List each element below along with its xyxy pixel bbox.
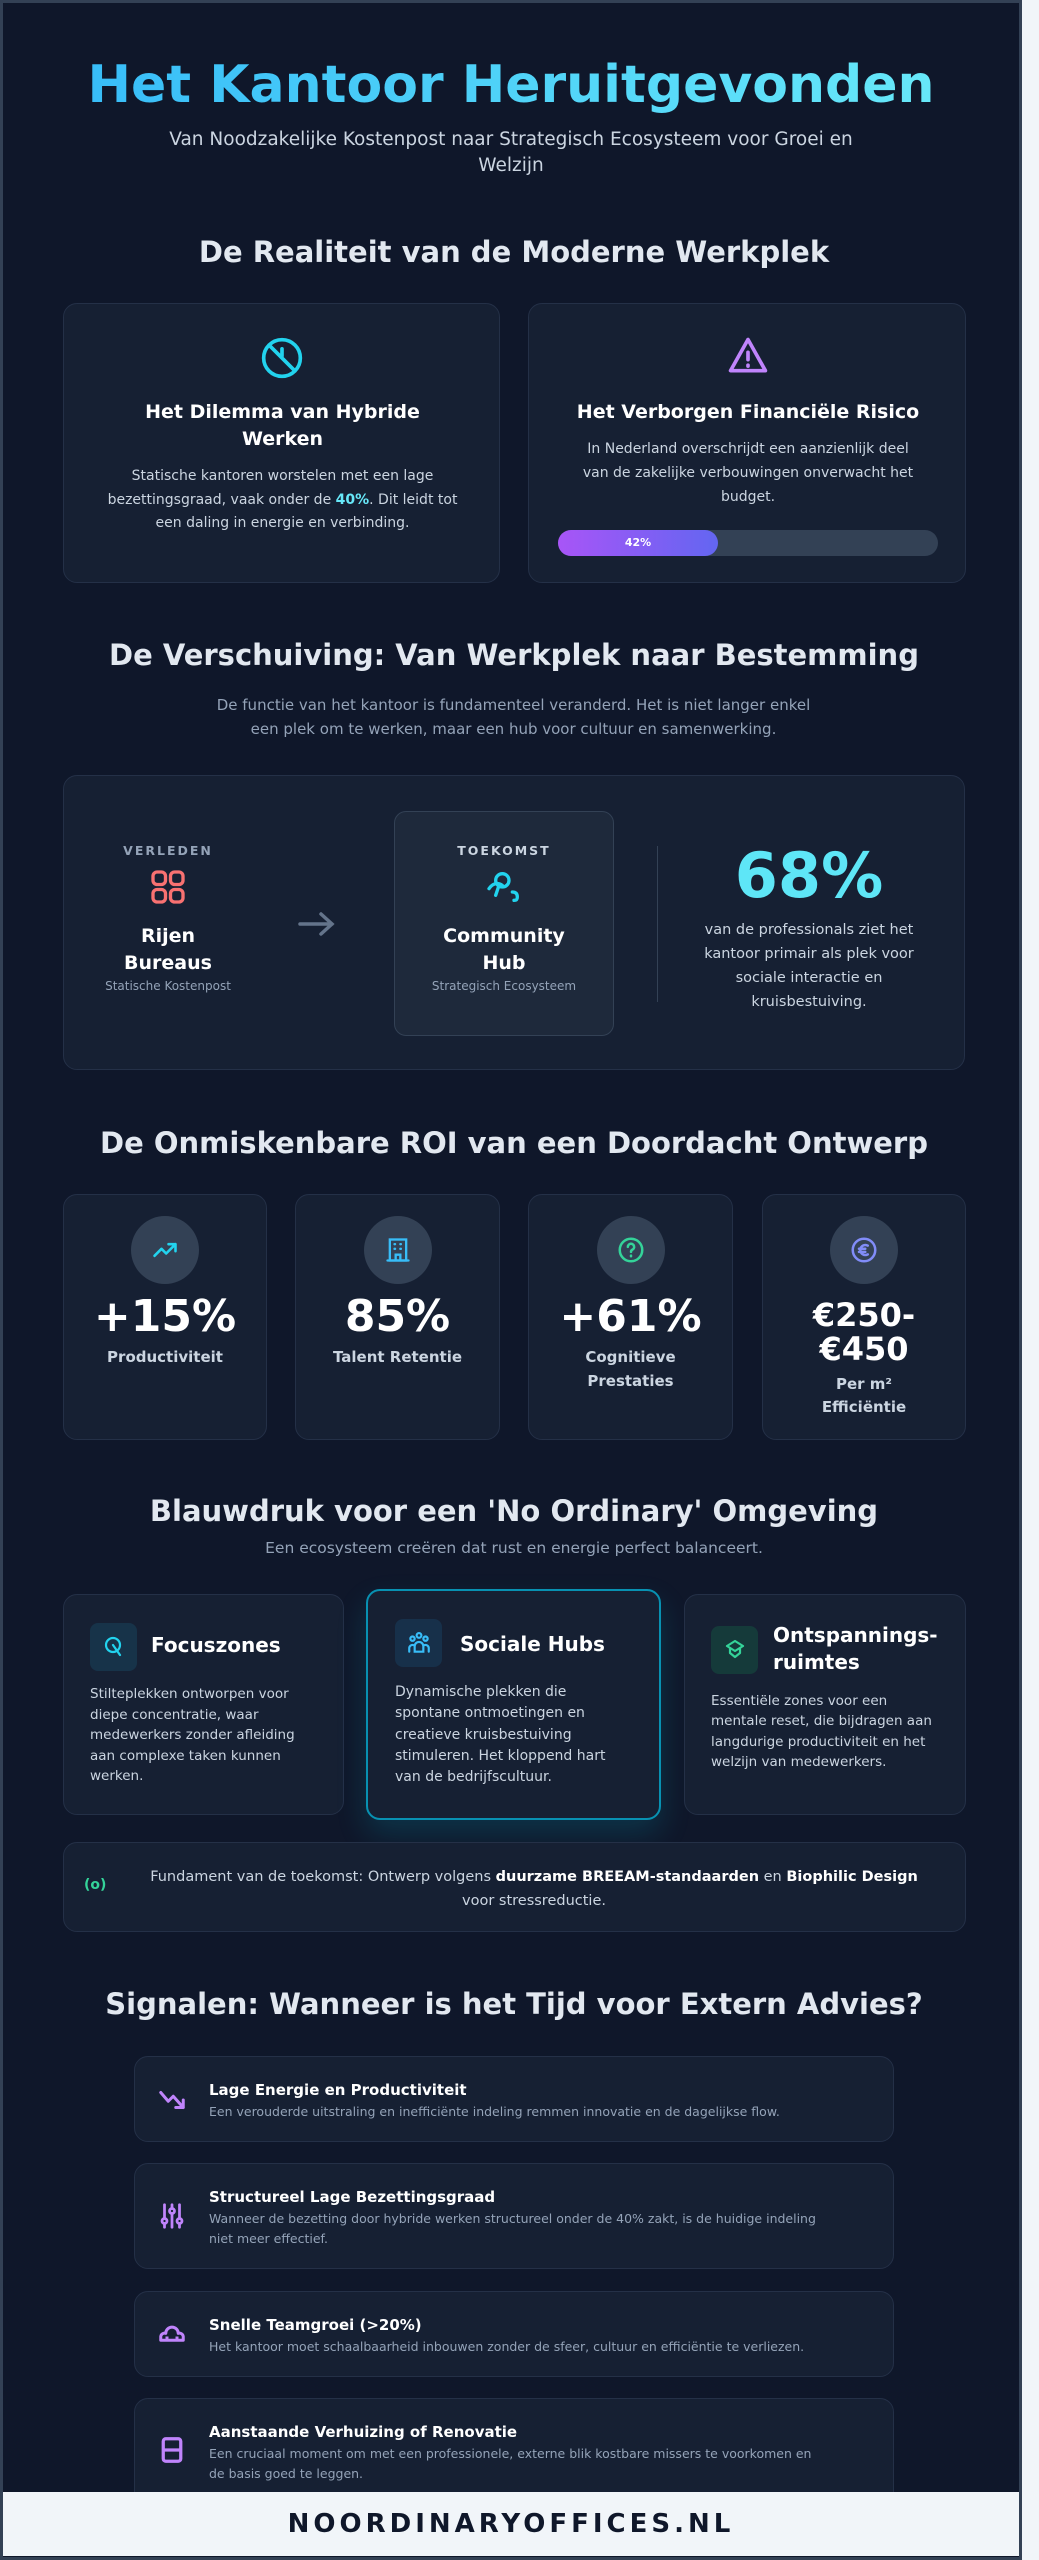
- panel: focuszones: Stilteplekken ontworpen voor diepe concentratie, waar medewerkers zonder afleiding aan complexe taken kunnen werken.: [90, 1686, 295, 1784]
- stat card: efficientie: [762, 1194, 966, 1440]
- past column: Statische Kostenpost: [105, 979, 231, 993]
- card title: Het Verborgen Financiële Risico: [577, 401, 919, 423]
- stat card: cognitief: [528, 1194, 733, 1440]
- panel: ontspanningsruimtes: ruimtes: [773, 1650, 860, 1674]
- icon: desk grid: [151, 870, 185, 904]
- icon: focus: [90, 1623, 137, 1671]
- arrow: [298, 912, 334, 936]
- stat card: cognitief: +61%: [559, 1291, 702, 1342]
- blueprint subtitle: Een ecosysteem creëren dat rust en energie perfect balanceert.: [265, 1539, 763, 1557]
- card title: Het Dilemma van Hybride: [145, 401, 420, 423]
- callout: fundament: [63, 1842, 966, 1932]
- stat card: cognitief: Cognitieve: [585, 1348, 676, 1366]
- signal: verhuizing: [134, 2398, 894, 2508]
- future box: TOEKOMST: [457, 843, 551, 858]
- stat card: efficientie: Per m²: [836, 1375, 892, 1393]
- icon: community: [487, 872, 519, 902]
- card text: Statische kantoren worstelen met een lage bezettingsgraad, vaak onder de 40%. Dit leidt tot een daling in energie en verbinding.: [108, 468, 457, 531]
- signal: bezettingsgraad: Structureel Lage Bezettingsgraad: [209, 2188, 495, 2206]
- panel: sociale hubs (highlighted): Dynamische plekken die spontane ontmoetingen en creatieve kruisbestuiving stimuleren. Het kloppend hart van de bedrijfscultuur.: [395, 1684, 605, 1785]
- signal: teamgroei: [134, 2291, 894, 2377]
- signal: bezettingsgraad: niet meer effectief.: [209, 2231, 328, 2246]
- panel: ontspanningsruimtes: Essentiële zones voor een mentale reset, die bijdragen aan langdurige productiviteit en het welzijn van medewerkers.: [711, 1693, 932, 1770]
- footer: [3, 2492, 1019, 2556]
- past column: [105, 843, 231, 993]
- signal: lage energie: Een verouderde uitstraling en inefficiënte indeling remmen innovatie en de dagelijkse flow.: [209, 2104, 780, 2119]
- signal: verhuizing: Een cruciaal moment om met een professionele, externe blik kostbare missers te voorkomen en: [209, 2446, 811, 2461]
- panel: focuszones: Focuszones: [151, 1633, 281, 1657]
- footer: NOORDINARYOFFICES.NL: [288, 2509, 734, 2539]
- panel: shift: [63, 775, 965, 1070]
- divider: [657, 846, 658, 1002]
- signal: verhuizing: de basis goed te leggen.: [209, 2466, 363, 2481]
- card title: Werken: [242, 428, 323, 450]
- panel: sociale hubs (highlighted): [366, 1589, 661, 1820]
- progress bar 42%: [558, 530, 938, 556]
- panel: sociale hubs (highlighted): Sociale Hubs: [460, 1632, 605, 1656]
- card title: [145, 401, 420, 450]
- callout: fundament: Fundament van de toekomst: Ontwerp volgens duurzame BREEAM-standaarden en Biophilic Design: [150, 1869, 918, 1885]
- panel: focuszones: [63, 1594, 344, 1815]
- stat 68%: [704, 839, 914, 1010]
- intro text: De functie van het kantoor is fundamenteel veranderd. Het is niet langer enkel een plek om te werken, maar een hub voor cultuur en samenwerking.: [217, 696, 810, 738]
- card text: In Nederland overschrijdt een aanzienlijk deel van de zakelijke verbouwingen onverwacht het budget.: [583, 441, 913, 505]
- past column: Bureaus: [124, 952, 212, 974]
- icon: team: [159, 2326, 185, 2342]
- icon: relax: [711, 1626, 758, 1674]
- panel: ontspanningsruimtes: [684, 1594, 966, 1815]
- stat 68%: 68%: [735, 839, 883, 912]
- signal: lage energie: [134, 2056, 894, 2142]
- heading: realiteit: De Realiteit van de Moderne Werkplek: [199, 235, 829, 269]
- icon: boxes: [162, 2437, 182, 2463]
- stat card: talent: Talent Retentie: [333, 1348, 462, 1366]
- future box: Hub: [482, 952, 526, 974]
- stat card: talent: 85%: [345, 1291, 450, 1342]
- icon: warning: [728, 338, 768, 372]
- stat card: efficientie: Efficiëntie: [822, 1398, 906, 1416]
- callout: fundament: voor stressreductie.: [462, 1893, 606, 1909]
- title: Het Kantoor Heruitgevonden: [88, 55, 934, 115]
- stat card: efficientie: €250-: [813, 1296, 915, 1334]
- heading: verschuiving: De Verschuiving: Van Werkplek naar Bestemming: [109, 638, 919, 672]
- stat card: productiviteit: +15%: [94, 1291, 236, 1342]
- icon: no-clock: [262, 338, 302, 378]
- signal: teamgroei: Snelle Teamgroei (>20%): [209, 2316, 422, 2334]
- future box: Community: [443, 925, 565, 947]
- heading: ROI: De Onmiskenbare ROI van een Doordacht Ontwerp: [100, 1126, 928, 1160]
- past column: Rijen: [141, 925, 195, 947]
- panel: hybride dilemma: [63, 303, 500, 583]
- heading: blauwdruk: Blauwdruk voor een 'No Ordinary' Omgeving: [150, 1494, 878, 1528]
- past column: VERLEDEN: [123, 843, 213, 858]
- icon: people: [395, 1619, 442, 1667]
- heading: signalen: Signalen: Wanneer is het Tijd voor Extern Advies?: [105, 1987, 923, 2021]
- future box: Strategisch Ecosysteem: [432, 979, 576, 993]
- future box: [394, 811, 614, 1036]
- subtitle: Van Noodzakelijke Kostenpost naar Strategisch Ecosysteem voor Groei en Welzijn: [169, 129, 853, 176]
- stat card: efficientie: €450: [819, 1330, 909, 1368]
- stat card: cognitief: Prestaties: [587, 1372, 674, 1390]
- signal: teamgroei: Het kantoor moet schaalbaarheid inbouwen zonder de sfeer, cultuur en efficiëntie te verliezen.: [209, 2339, 804, 2354]
- icon: signal: (o): [84, 1877, 106, 1893]
- signal: bezettingsgraad: Wanneer de bezetting door hybride werken structureel onder de 40% zakt, is de huidige indeling: [209, 2211, 816, 2226]
- panel: financieel risico: [528, 303, 966, 583]
- stat 68%: van de professionals ziet het kantoor primair als plek voor sociale interactie en kruisbestuiving.: [704, 922, 914, 1010]
- icon: sliders: [160, 2203, 184, 2229]
- stat card: talent: [295, 1194, 500, 1440]
- panel: ontspanningsruimtes: Ontspannings-: [773, 1623, 938, 1647]
- signal: bezettingsgraad: [134, 2163, 894, 2269]
- signal: verhuizing: Aanstaande Verhuizing of Renovatie: [209, 2423, 517, 2441]
- stat card: productiviteit: Productiviteit: [107, 1348, 223, 1366]
- icon: trend down: [159, 2090, 185, 2110]
- signal: lage energie: Lage Energie en Productiviteit: [209, 2081, 467, 2099]
- progress bar 42%: 42%: [625, 536, 651, 549]
- stat card: productiviteit: [63, 1194, 267, 1440]
